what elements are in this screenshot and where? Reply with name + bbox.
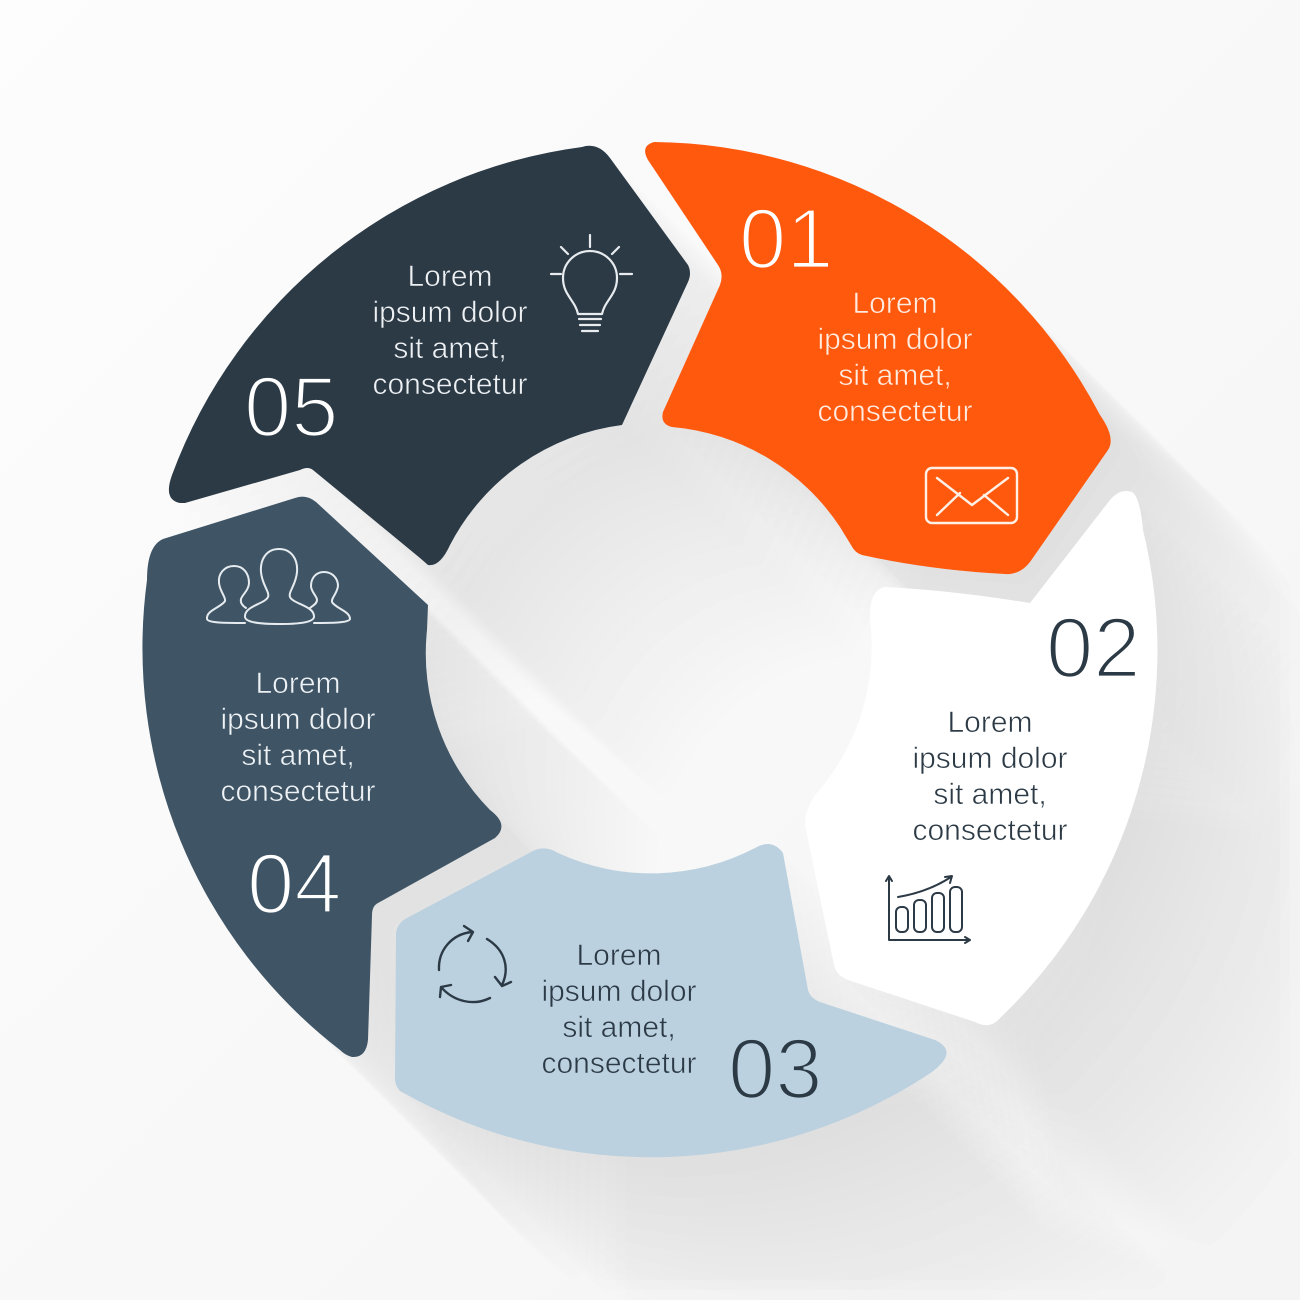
panel: step 02 <box>805 491 1157 1025</box>
text block 03: Lorem <box>576 939 662 972</box>
segment shape 04 <box>142 497 501 1057</box>
text block 04: ipsum dolor <box>220 703 376 736</box>
text block 04: consectetur <box>220 775 376 808</box>
icon: cycle arrows <box>439 926 511 1002</box>
segment shape 05 <box>169 146 690 565</box>
text block 03: sit amet, <box>562 1011 676 1044</box>
text block 03: consectetur <box>541 1047 697 1080</box>
text block 02: Lorem <box>947 706 1033 739</box>
number 02: 02 <box>1046 601 1141 696</box>
segment shape 01 <box>645 142 1111 574</box>
text block 02: consectetur <box>912 814 1068 847</box>
number 04: 04 <box>247 837 342 932</box>
text block 04: sit amet, <box>241 739 355 772</box>
number 03: 03 <box>728 1022 823 1117</box>
text block 02: sit amet, <box>933 778 1047 811</box>
number 01: 01 <box>739 192 834 287</box>
panel: step 05 <box>169 146 690 565</box>
panel: step 03 <box>395 844 947 1157</box>
icon: people <box>207 549 350 624</box>
icon: envelope <box>926 468 1017 523</box>
number 05: 05 <box>244 360 339 455</box>
panel: step 04 <box>142 497 501 1057</box>
text block 01: ipsum dolor <box>817 323 973 356</box>
segment shape 02 <box>805 491 1157 1025</box>
text block 01: consectetur <box>817 395 973 428</box>
text block 01: Lorem <box>852 287 938 320</box>
text block 05: consectetur <box>372 368 528 401</box>
text block 05: Lorem <box>407 260 493 293</box>
long diagonal shadow of the ring <box>142 142 1300 1300</box>
text block 05: ipsum dolor <box>372 296 528 329</box>
icon: light bulb <box>551 235 632 331</box>
panel: step 01 <box>645 142 1111 574</box>
text block 02: ipsum dolor <box>912 742 1068 775</box>
text block 01: sit amet, <box>838 359 952 392</box>
text block 03: ipsum dolor <box>541 975 697 1008</box>
segment shape 03 <box>395 844 947 1157</box>
text block 04: Lorem <box>255 667 341 700</box>
icon: bar chart <box>886 876 970 943</box>
text block 05: sit amet, <box>393 332 507 365</box>
